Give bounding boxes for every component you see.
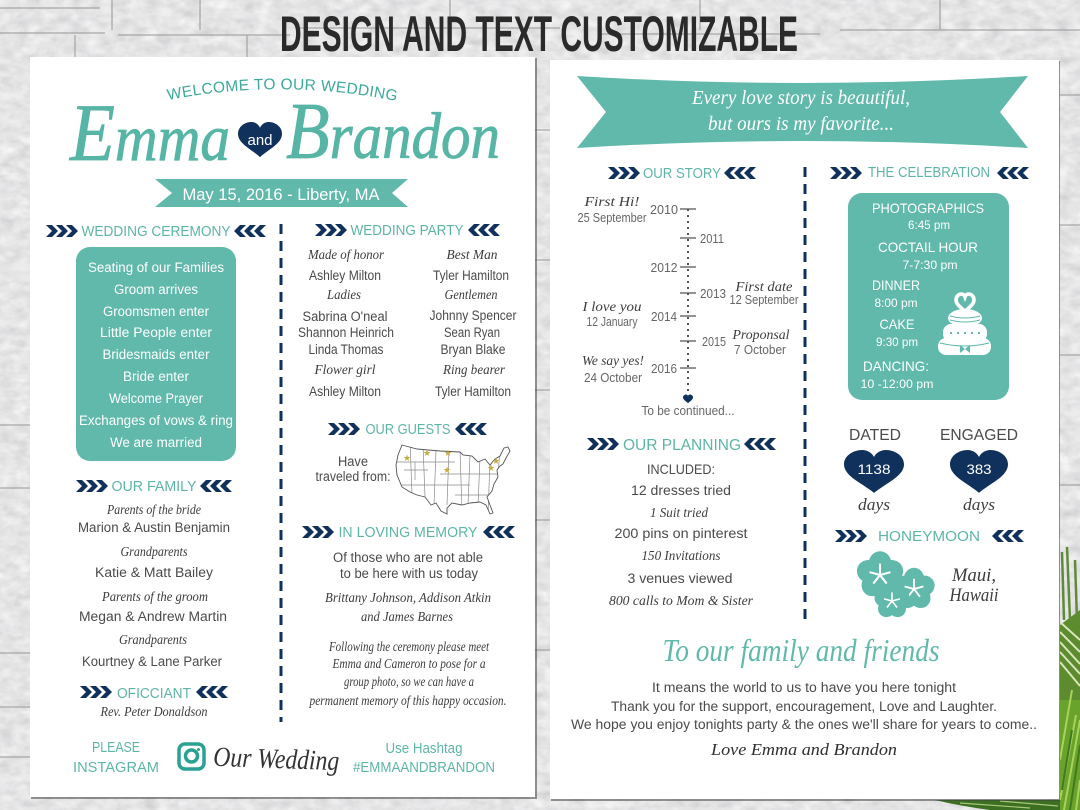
panel: right program page (550, 60, 1060, 801)
family list: Grandparents (120, 545, 188, 560)
timeline events: Proponsal (732, 328, 790, 343)
hashtag (353, 740, 495, 776)
icon: wedding cake (938, 294, 991, 355)
panel: ceremony order: Bride enter (123, 369, 189, 384)
memory text: and James Barnes (361, 610, 453, 625)
memory text: Following the ceremony please meet (328, 640, 490, 655)
heading: in loving memory (302, 524, 515, 541)
heart: and: and (247, 132, 273, 149)
divider (280, 224, 282, 722)
engaged counter (940, 427, 1018, 514)
wedding party list: Bryan Blake (440, 342, 506, 357)
panel: ceremony order: We are married (110, 435, 202, 450)
panel: ceremony order: Little People enter (100, 325, 213, 340)
panel: celebration schedule: 9:30 pm (876, 335, 918, 349)
dated counter: 1138 (858, 462, 890, 477)
planning list: 150 Invitations (642, 549, 721, 564)
heading: in loving memory: IN LOVING MEMORY (338, 524, 478, 541)
planning list (609, 461, 754, 609)
timeline (642, 203, 734, 418)
wedding party list: Flower girl (314, 363, 376, 378)
timeline events (578, 195, 798, 385)
timeline events: First date (734, 280, 792, 295)
memory text: Brittany Johnson, Addison Atkin (325, 591, 491, 606)
timeline: 2014 (651, 310, 677, 324)
our wedding script: Our Wedding (213, 742, 340, 777)
panel: ceremony order: Groomsmen enter (103, 304, 209, 319)
names: Emma (69, 87, 230, 178)
wedding party list: Sean Ryan (444, 325, 500, 340)
planning list: 200 pins on pinterest (614, 525, 748, 541)
dated counter: days (858, 495, 890, 514)
heading: wedding ceremony: WEDDING CEREMONY (82, 223, 230, 240)
panel: celebration schedule: DANCING: (863, 358, 929, 374)
wedding party list: Linda Thomas (308, 342, 384, 357)
date ribbon (155, 179, 408, 207)
timeline: To be continued... (642, 404, 734, 418)
panel: celebration schedule: PHOTOGRAPHICS (872, 200, 984, 216)
heading: officiant (80, 685, 228, 702)
panel: ceremony order (76, 247, 236, 461)
timeline events: First Hi! (583, 195, 640, 210)
timeline events: 7 October (734, 343, 786, 357)
memory text (309, 550, 506, 709)
dated counter: DATED (849, 427, 901, 444)
timeline: 2010 (650, 203, 678, 217)
timeline events: We say yes! (582, 354, 644, 369)
hashtag: #EMMAANDBRANDON (353, 759, 495, 776)
hashtag: Use Hashtag (386, 740, 462, 757)
panel: celebration schedule: 6:45 pm (908, 218, 950, 232)
heading: our family: OUR FAMILY (112, 478, 196, 495)
heading: the celebration (830, 164, 1029, 181)
wedding party list: Ring bearer (442, 363, 506, 378)
heading: our guests: OUR GUESTS (366, 421, 450, 438)
memory text: to be here with us today (340, 566, 478, 581)
heart: and (238, 122, 282, 157)
panel: ceremony order: Seating of our Families (88, 260, 224, 275)
US map with stars: ★ (487, 463, 495, 473)
date ribbon: May 15, 2016 - Liberty, MA (182, 185, 380, 204)
closing heading: To our family and friends (662, 632, 940, 668)
panel: celebration schedule: 8:00 pm (874, 296, 918, 310)
heading: wedding party: WEDDING PARTY (350, 222, 464, 239)
panel: left program page (30, 57, 537, 799)
heading: our planning: OUR PLANNING (623, 437, 741, 454)
timeline: 2012 (650, 261, 678, 275)
palm leaves (935, 547, 1080, 810)
family list: Parents of the groom (101, 590, 208, 605)
welcome arc: WELCOME TO OUR WEDDING (166, 78, 397, 100)
dated counter (844, 427, 904, 514)
wedding party list: Shannon Heinrich (298, 325, 394, 340)
heading: our story: OUR STORY (643, 165, 721, 182)
panel: celebration schedule (848, 193, 1009, 400)
signature: Love Emma and Brandon (710, 740, 897, 759)
US map with stars: ★ (403, 453, 411, 463)
family list: Parents of the bride (106, 503, 201, 518)
panel: ceremony order: Groom arrives (114, 282, 198, 297)
heading: wedding party (315, 222, 500, 239)
family list: Megan & Andrew Martin (79, 609, 227, 624)
officiant name: Rev. Peter Donaldson (100, 705, 208, 720)
wedding party list (298, 248, 517, 399)
guests text: Have (338, 454, 368, 469)
quote banner: but ours is my favorite... (708, 113, 894, 135)
guests text: traveled from: (316, 469, 390, 484)
timeline events: 12 September (730, 293, 798, 307)
wedding party list: Ashley Milton (309, 268, 381, 283)
memory text: permanent memory of this happy occasion. (309, 694, 506, 709)
timeline: 2011 (700, 232, 724, 246)
family list: Marion & Austin Benjamin (78, 520, 230, 535)
timeline events: I love you (581, 300, 642, 315)
closing message: It means the world to us to have you here tonight (652, 680, 956, 695)
planning list: 12 dresses tried (631, 482, 731, 498)
panel: celebration schedule: DINNER (872, 277, 920, 293)
icon: hibiscus flowers (854, 551, 937, 621)
names (69, 87, 500, 178)
engaged counter: 383 (966, 462, 992, 477)
honeymoon destination: Maui, (951, 565, 996, 586)
wedding party list: Gentlemen (444, 288, 498, 303)
timeline events: 25 September (578, 211, 646, 225)
heading: honeymoon: HONEYMOON (878, 528, 980, 545)
heading: the celebration: THE CELEBRATION (868, 164, 990, 181)
planning list: 1 Suit tried (650, 506, 709, 521)
memory text: group photo, so we can have a (344, 675, 474, 690)
US map with stars: ★ (444, 448, 452, 458)
US map with stars (395, 440, 510, 515)
wedding party list: Tyler Hamilton (435, 384, 511, 399)
honeymoon destination (949, 565, 998, 606)
quote banner (577, 76, 1028, 148)
wedding party list: Ladies (326, 288, 361, 303)
panel: ceremony order: Exchanges of vows & ring (79, 413, 233, 428)
divider (804, 167, 806, 622)
names: Brandon (286, 88, 500, 176)
closing message: Thank you for the support, encouragement, Love and Laughter. (611, 699, 997, 714)
planning list: INCLUDED: (647, 461, 715, 477)
heading: our story (608, 165, 756, 182)
please instagram: INSTAGRAM (73, 759, 159, 776)
please instagram (73, 739, 159, 776)
closing message (571, 680, 1037, 732)
family list (78, 503, 230, 669)
honeymoon destination: Hawaii (949, 585, 998, 606)
heading: honeymoon (835, 528, 1024, 545)
icon: instagram (179, 744, 204, 769)
heading: our family (76, 478, 232, 495)
timeline: 2013 (700, 287, 726, 301)
quote banner: Every love story is beautiful, (691, 87, 910, 109)
family list: Kourtney & Lane Parker (82, 654, 222, 669)
US map with stars: ★ (492, 456, 500, 466)
wedding party list: Best Man (446, 248, 498, 263)
heading: our guests (328, 421, 487, 438)
panel: celebration schedule: CAKE (880, 316, 914, 332)
please instagram: PLEASE (92, 739, 140, 756)
planning list: 800 calls to Mom & Sister (609, 594, 754, 609)
family list: Katie & Matt Bailey (95, 565, 213, 580)
timeline: 2016 (651, 362, 677, 376)
panel: celebration schedule: 10 -12:00 pm (860, 377, 934, 391)
US map with stars: ★ (443, 465, 451, 475)
guests text (316, 454, 390, 484)
memory text: Emma and Cameron to pose for a (332, 657, 486, 672)
wedding party list: Ashley Milton (309, 384, 381, 399)
timeline events: 12 January (586, 315, 638, 329)
panel: ceremony order: Bridesmaids enter (102, 347, 210, 362)
wedding party list: Made of honor (307, 248, 384, 263)
timeline events: 24 October (584, 371, 642, 385)
panel: celebration schedule: 7-7:30 pm (902, 258, 958, 272)
family list: Grandparents (119, 633, 187, 648)
wedding party list: Sabrina O'neal (302, 309, 388, 324)
closing message: We hope you enjoy tonights party & the ones we'll share for years to come.. (571, 717, 1037, 732)
timeline: 2015 (702, 335, 726, 349)
heading: our planning (587, 437, 776, 454)
engaged counter: days (963, 495, 995, 514)
planning list: 3 venues viewed (628, 570, 732, 586)
panel: celebration schedule: COCTAIL HOUR (878, 239, 978, 255)
panel: ceremony order: Welcome Prayer (109, 391, 203, 406)
wedding party list: Tyler Hamilton (433, 268, 509, 283)
US map with stars: ★ (423, 448, 431, 458)
engaged counter: ENGAGED (940, 427, 1018, 444)
wedding party list: Johnny Spencer (430, 308, 517, 323)
memory text: Of those who are not able (333, 550, 483, 565)
heading: officiant: OFICCIANT (117, 685, 191, 702)
